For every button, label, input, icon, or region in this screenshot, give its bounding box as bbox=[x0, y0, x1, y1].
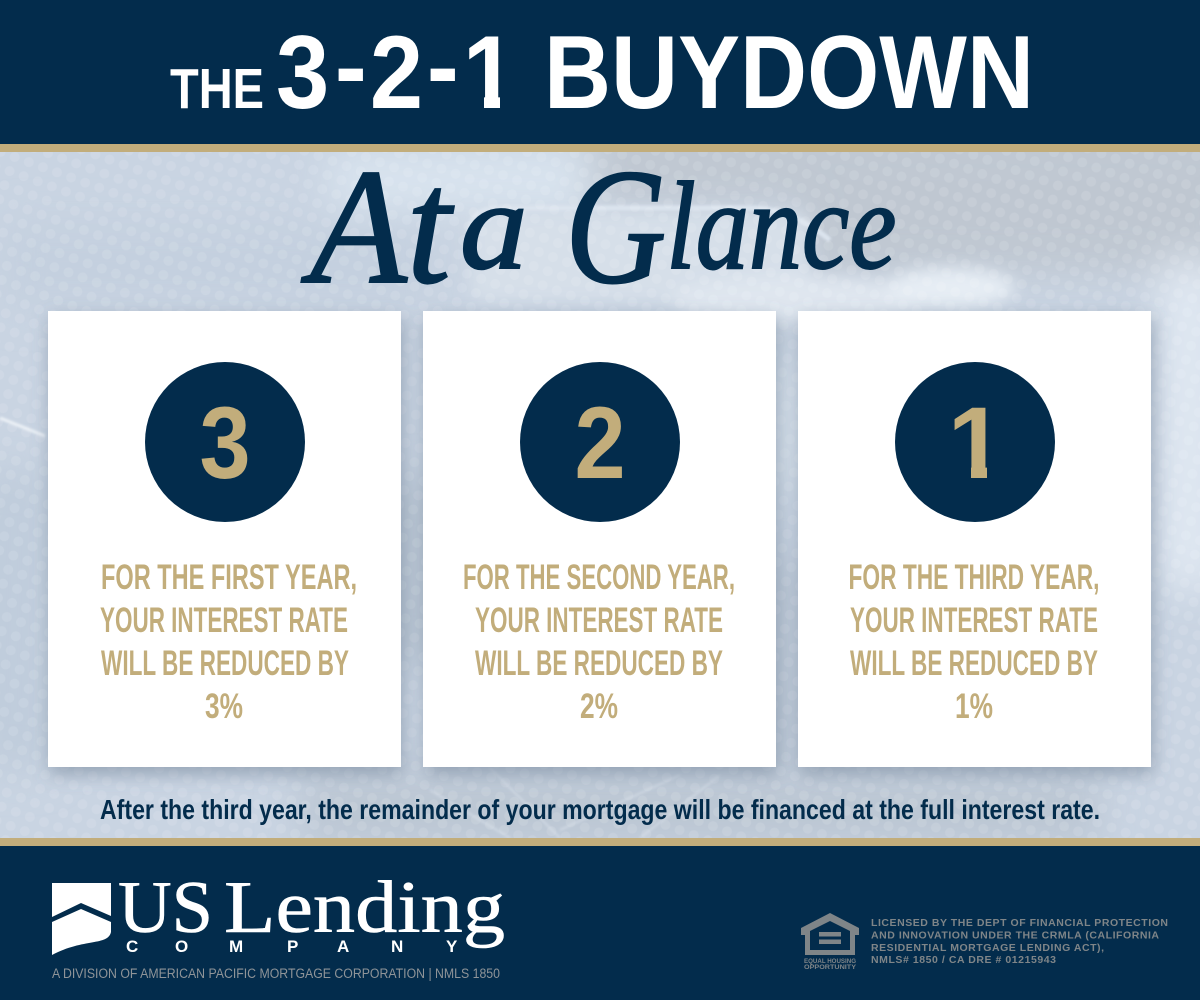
header band bbox=[0, 0, 1200, 144]
icon: equal housing opportunity: EQUAL HOUSING bbox=[804, 958, 856, 965]
number badge 3: 3 bbox=[199, 385, 251, 500]
card 2 text: YOUR INTEREST RATE bbox=[475, 601, 723, 640]
header gold rule bbox=[0, 144, 1200, 152]
script word: Glance: G bbox=[565, 137, 666, 319]
number badge 2: 2 bbox=[574, 385, 626, 500]
panel: card 3 bbox=[48, 311, 401, 767]
card 3 text: WILL BE REDUCED BY bbox=[101, 644, 349, 683]
background photo panel bbox=[0, 120, 1200, 845]
card 3 text: 3% bbox=[205, 687, 243, 726]
panel: card 1 bbox=[798, 311, 1151, 767]
title bbox=[170, 35, 1028, 109]
logo word: COMPANY: COMPANY bbox=[126, 937, 458, 956]
logo tagline: A DIVISION OF AMERICAN PACIFIC MORTGAGE CORPORATION | NMLS 1850 bbox=[52, 966, 500, 981]
logo word: Lending: Lending bbox=[224, 867, 505, 949]
title word: BUYDOWN: BUYDOWN bbox=[544, 15, 1034, 131]
logo word: US: US bbox=[118, 867, 213, 949]
card 2 text bbox=[463, 558, 735, 726]
card 2 text: FOR THE SECOND YEAR, bbox=[463, 558, 735, 597]
title word: THE: THE bbox=[170, 57, 264, 121]
licensing text: RESIDENTIAL MORTGAGE LENDING ACT), bbox=[871, 942, 1104, 954]
icon: flag house mark bbox=[52, 883, 111, 955]
card 2 text: 2% bbox=[580, 687, 618, 726]
card 1 text: 1% bbox=[955, 687, 993, 726]
licensing text: AND INNOVATION UNDER THE CRMLA (CALIFORNIA bbox=[871, 930, 1159, 942]
number badge 1 bbox=[895, 362, 1055, 522]
panel: card 2 bbox=[423, 311, 776, 767]
logo: US Lending Company bbox=[52, 867, 505, 956]
card 3 text: FOR THE FIRST YEAR, bbox=[101, 558, 357, 597]
licensing text: LICENSED BY THE DEPT OF FINANCIAL PROTECTION bbox=[871, 917, 1168, 929]
number badge 1: 1 bbox=[948, 386, 1004, 500]
card 3 text bbox=[100, 558, 357, 726]
script word: At: At bbox=[301, 135, 455, 318]
title numerals: 3-2-1: 3-2-1 bbox=[276, 9, 516, 131]
footer band bbox=[0, 846, 1200, 1000]
card 2 text: WILL BE REDUCED BY bbox=[475, 644, 723, 683]
licensing text: NMLS# 1850 / CA DRE # 01215943 bbox=[871, 954, 1056, 966]
licensing text bbox=[871, 917, 1168, 966]
number badge 2 bbox=[520, 362, 680, 522]
script subtitle bbox=[301, 135, 896, 319]
script word: a: a bbox=[460, 158, 527, 296]
card 1 text bbox=[848, 558, 1100, 726]
number badge 3 bbox=[145, 362, 305, 522]
icon: equal housing opportunity: OPPORTUNITY bbox=[804, 964, 857, 971]
footer gold rule bbox=[0, 838, 1200, 846]
card 3 text: YOUR INTEREST RATE bbox=[100, 601, 348, 640]
card shadows bbox=[50, 318, 1153, 774]
script word: Glance: lance bbox=[666, 158, 896, 296]
icon: equal housing opportunity bbox=[801, 913, 859, 971]
